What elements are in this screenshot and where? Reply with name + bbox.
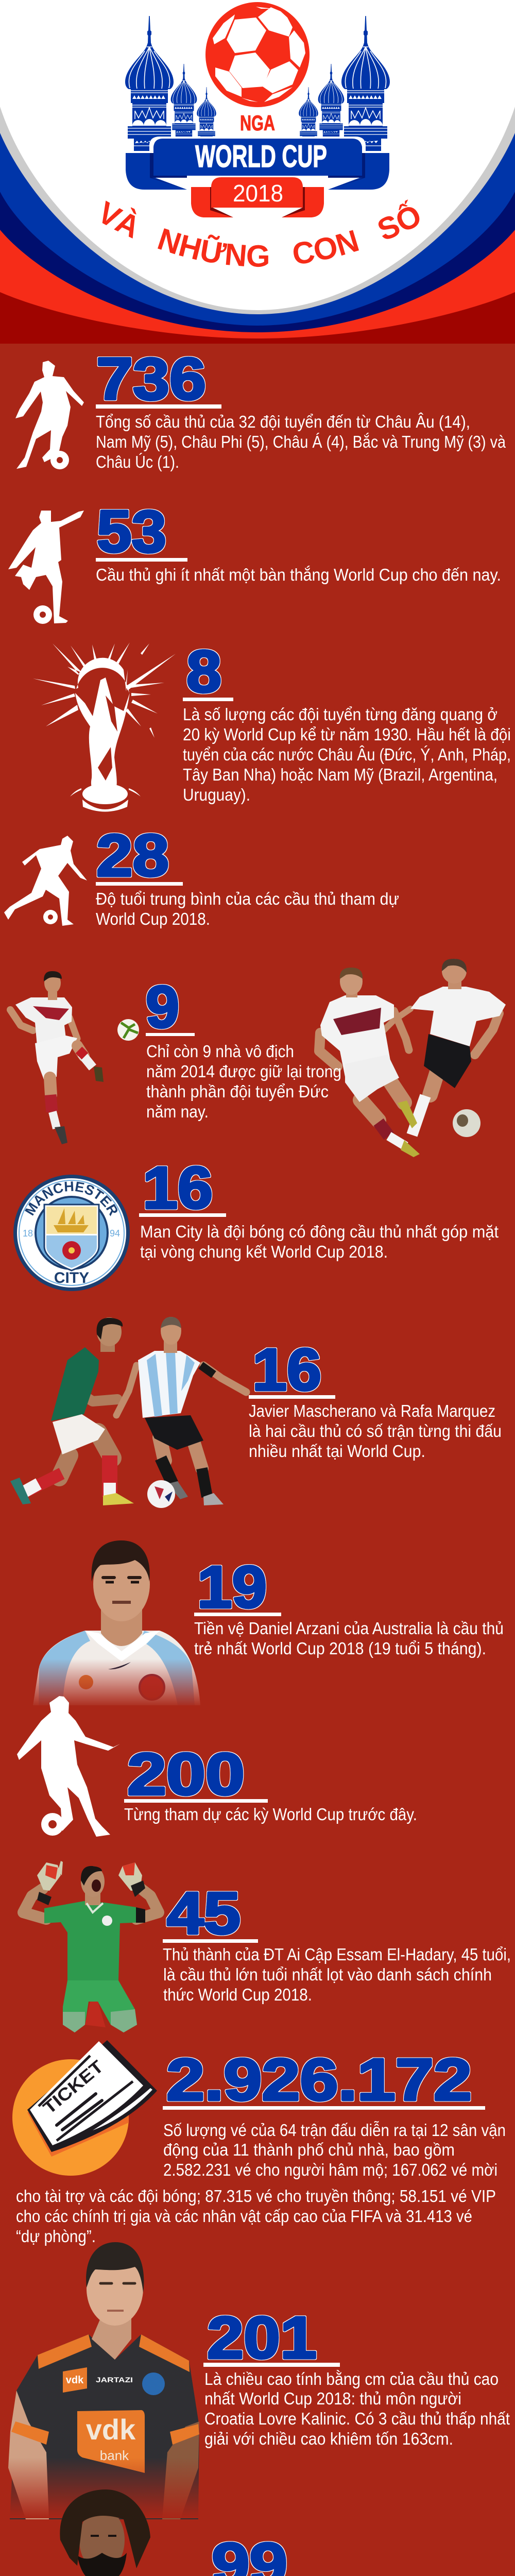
icon: player silhouette 28 xyxy=(4,836,87,926)
description: Chỉ còn 9 nhà vô địch xyxy=(146,1042,294,1061)
logo: football xyxy=(205,2,310,107)
number: 53 xyxy=(97,499,166,565)
photo: Essam El-Hadary goalkeeper xyxy=(23,1861,159,2032)
ball xyxy=(453,1109,480,1137)
number: 19 xyxy=(197,1554,267,1620)
white dome xyxy=(0,0,515,310)
description xyxy=(146,1042,341,1121)
photo: Rafa Marquez xyxy=(10,1317,134,1505)
icon: Manchester City badge: CITY xyxy=(54,1269,89,1286)
photo: German player number 13 xyxy=(381,959,506,1137)
rule xyxy=(163,1939,258,1943)
description xyxy=(96,889,399,928)
photo: German player number 19 xyxy=(319,968,420,1157)
rule xyxy=(194,1613,281,1616)
description xyxy=(204,2369,510,2448)
rule xyxy=(146,1033,195,1036)
description: Uruguay). xyxy=(183,785,250,804)
ball xyxy=(147,1480,175,1508)
description: Châu Úc (1). xyxy=(96,452,179,471)
rule xyxy=(249,1395,335,1399)
icon: player silhouette 53 xyxy=(8,511,84,624)
description: Từng tham dự các kỳ World Cup trước đây. xyxy=(124,1805,417,1824)
stat 9 xyxy=(146,974,341,1121)
photo: Daniel Arzani xyxy=(31,1540,203,1708)
logo: red 2018 ribbon xyxy=(187,176,328,217)
icon: tickets xyxy=(12,2040,157,2176)
number: 8 xyxy=(186,639,221,705)
rule xyxy=(163,2106,485,2110)
logo: NGA label: NGA xyxy=(240,111,275,135)
photo: Javier Mascherano xyxy=(116,1317,246,1508)
number: 45 xyxy=(167,1880,241,1946)
number: 16 xyxy=(143,1155,213,1221)
icon: tickets: TICKET xyxy=(40,2057,108,2118)
shield xyxy=(44,1205,99,1270)
icon: Manchester City badge: 18 xyxy=(23,1228,33,1239)
jersey logos: JARTAZI xyxy=(96,2376,133,2384)
header panel xyxy=(0,0,515,344)
logo: kremlin towers xyxy=(125,16,390,151)
rule xyxy=(203,2363,340,2367)
flag curve: grey band xyxy=(0,0,515,314)
flag curve: navy band xyxy=(0,0,515,332)
rule xyxy=(96,882,183,886)
stat 200 xyxy=(124,1741,417,1824)
number: 16 xyxy=(252,1337,321,1403)
flag curve: red band xyxy=(0,0,515,338)
rule xyxy=(124,1799,268,1803)
description: giải với chiều cao khiêm tốn 163cm. xyxy=(204,2429,453,2448)
description xyxy=(140,1222,499,1261)
description: Tổng số cầu thủ của 32 đội tuyển đến từ Châu Âu (14), xyxy=(96,412,470,431)
icon: Manchester City badge: 94 xyxy=(110,1228,120,1239)
2018 text: 2018 xyxy=(233,180,283,207)
stat 28 xyxy=(96,823,399,928)
icon: Manchester City badge xyxy=(13,1175,130,1291)
description: động của 11 thành phố chủ nhà, bao gồm xyxy=(163,2140,455,2159)
rule xyxy=(139,1213,226,1217)
description: World Cup 2018. xyxy=(96,909,210,928)
flag curve: blue band xyxy=(0,0,515,326)
stat 2.926.172 xyxy=(16,2047,506,2246)
stat 8 xyxy=(183,639,511,804)
stat 53 xyxy=(96,499,501,584)
description: thành phần đội tuyển Đức xyxy=(146,1082,329,1101)
description xyxy=(163,1945,511,2004)
jersey logos: vdk xyxy=(86,2413,136,2446)
description: thức World Cup 2018. xyxy=(163,1985,312,2004)
ball xyxy=(117,1019,139,1041)
description: trẻ nhất World Cup 2018 (19 tuổi 5 tháng). xyxy=(194,1639,486,1658)
icon: player silhouette 200 xyxy=(17,1696,120,1837)
stat 16 appearances xyxy=(249,1337,502,1461)
description xyxy=(96,412,506,471)
description: “dự phòng”. xyxy=(16,2227,96,2246)
number: 201 xyxy=(207,2305,317,2371)
number: 200 xyxy=(127,1741,245,1807)
rule xyxy=(183,698,233,701)
description: năm 2014 được giữ lại trong xyxy=(146,1062,341,1081)
jersey logos xyxy=(63,2367,165,2473)
icon: Manchester City badge: MANCHESTER xyxy=(25,1181,117,1216)
description: tại vòng chung kết World Cup 2018. xyxy=(140,1242,388,1261)
stat 201 xyxy=(203,2305,510,2448)
description: nhất World Cup 2018: thủ môn người xyxy=(204,2389,461,2408)
jersey logos: vdk xyxy=(66,2375,84,2386)
description: cho các chính trị gia và các nhân vật cấp cao của FIFA và 31.413 vé xyxy=(16,2207,472,2226)
number: 2.926.172 xyxy=(166,2047,472,2113)
stat 736 xyxy=(96,346,506,471)
rule xyxy=(96,558,187,562)
description xyxy=(194,1619,504,1658)
description xyxy=(16,2121,506,2246)
description: năm nay. xyxy=(146,1102,209,1121)
jersey logos: bank xyxy=(100,2448,129,2463)
number: 9 xyxy=(146,974,179,1040)
rule xyxy=(96,404,221,409)
description: Man City là đội bóng có đông cầu thủ nhất góp mặt xyxy=(140,1222,499,1241)
description: Độ tuổi trung bình của các cầu thủ tham dự xyxy=(96,889,399,908)
photo: Roman Torres xyxy=(5,2489,206,2576)
stat 16 Man City xyxy=(139,1155,499,1261)
WORLD CUP text: WORLD CUP xyxy=(195,139,327,174)
description: là cầu thủ lớn tuổi nhất lọt vào danh sách chính xyxy=(163,1965,492,1984)
description: nhiều nhất tại World Cup. xyxy=(249,1442,425,1461)
stat 45 xyxy=(163,1880,511,2004)
description xyxy=(183,705,511,804)
number: 736 xyxy=(96,346,206,412)
icon: world cup trophy xyxy=(33,642,176,812)
description xyxy=(249,1401,502,1461)
logo: blue WORLD CUP ribbon xyxy=(126,137,389,190)
number: 28 xyxy=(96,823,169,889)
icon: player silhouette 736 xyxy=(15,361,84,469)
curved title: VÀ NHỮNG CON SỐ xyxy=(102,199,419,267)
stat 19 xyxy=(194,1554,504,1658)
photo: German player number 8 with ball xyxy=(10,971,139,1144)
photo: Lovre Kalinic xyxy=(5,2242,203,2519)
